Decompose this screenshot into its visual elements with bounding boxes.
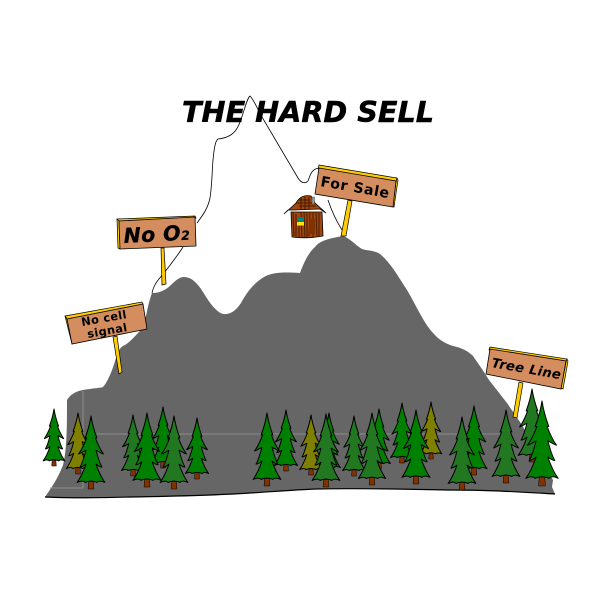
- cabin: [284, 196, 326, 238]
- sign: For Sale: [315, 165, 398, 236]
- title: THE HARD SELL: [182, 96, 434, 129]
- sign: No O2: No O2: [123, 221, 191, 248]
- sign: No cell signal: No cell: [80, 308, 128, 329]
- sign: No cell signal: [65, 302, 147, 374]
- sign: No cell signal: signal: [86, 321, 129, 341]
- mountain: [45, 236, 555, 498]
- sign: Tree Line: [486, 347, 568, 418]
- forest: centre group: [253, 409, 390, 487]
- forest: left group: [43, 409, 105, 489]
- snow peak outline: [152, 96, 342, 293]
- sign: No O2: [117, 216, 196, 285]
- forest: centre-left group: [121, 407, 209, 489]
- sign: For Sale: For Sale: [319, 174, 391, 202]
- sign: Tree Line: Tree Line: [490, 356, 562, 383]
- forest: right group: [391, 389, 558, 490]
